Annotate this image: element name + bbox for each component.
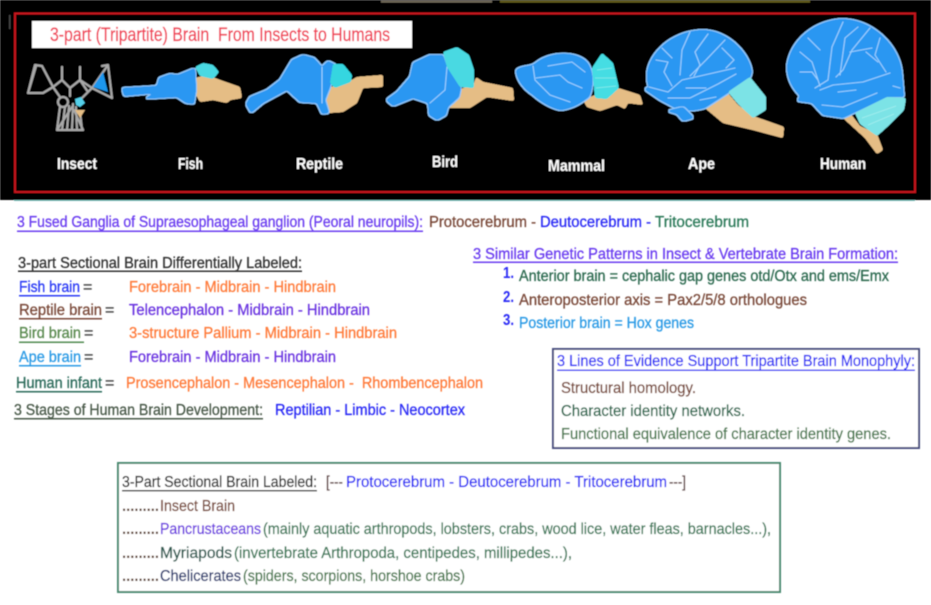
text block: genetic patterns: 3 Similar Genetic Patterns in Insect & Vertebrate Brain Formation: [473, 246, 898, 263]
panel: sectional brain labeled: Protocerebrum - Deutocerebrum - Tritocerebrum [346, 474, 667, 491]
panel: sectional brain labeled: [--- [326, 474, 343, 491]
icon: mammal brain [516, 53, 643, 111]
panel: lines of evidence: Character identity networks. [561, 403, 745, 420]
icon: reptile brain [246, 55, 383, 114]
text block: genetic patterns: 1. [503, 265, 514, 282]
panel: sectional brain labeled: ......... [122, 521, 159, 538]
text block: sectional brain list: Forebrain - Midbrain - Hindbrain [129, 279, 336, 296]
icon: insect brain [28, 65, 112, 130]
panel: sectional brain labeled: Chelicerates [160, 568, 241, 585]
text block: fused ganglia: 3 Fused Ganglia of Supraesophageal ganglion (Peoral neuropils): [17, 214, 423, 231]
species labels: Human [820, 156, 866, 173]
text block: sectional brain list: = [84, 325, 93, 342]
species labels: Ape [688, 156, 715, 173]
text block: sectional brain list: Fish brain [19, 279, 80, 296]
text block: stages of development: 3 Stages of Human Brain Development: [14, 402, 263, 419]
text block: sectional brain list: Ape brain [19, 349, 81, 366]
text block: sectional brain list: Bird brain [19, 325, 81, 342]
panel: lines of evidence: Structural homology. [561, 380, 696, 397]
icon: ape brain [644, 30, 784, 138]
text block: genetic patterns: Posterior brain = Hox genes [519, 315, 694, 332]
text block: fused ganglia [17, 214, 749, 232]
text block: sectional brain list: 3-part Sectional Brain Differentially Labeled: [18, 255, 302, 272]
text block: genetic patterns: 2. [503, 289, 514, 306]
icon: fish brain [122, 63, 242, 104]
text block: sectional brain list: Human infant [16, 375, 102, 392]
icon: human brain [787, 19, 906, 154]
text block: fused ganglia: Tritocerebrum [655, 214, 749, 231]
species labels: Bird [432, 154, 458, 171]
panel: sectional brain labeled [118, 463, 780, 592]
text block: sectional brain list: = [105, 375, 114, 392]
panel: sectional brain labeled: Insect Brain [160, 498, 235, 515]
text block: fused ganglia: Protocerebrum - [429, 214, 536, 231]
text block: sectional brain list [16, 255, 483, 392]
species labels: Mammal [548, 158, 605, 175]
text block: fused ganglia: Deutocerebrum - [540, 214, 651, 231]
text block: genetic patterns: Anterior brain = cephalic gap genes otd/Otx and ems/Emx [519, 268, 889, 285]
text block: sectional brain list: = [105, 302, 114, 319]
text block: sectional brain list: Forebrain - Midbrain - Hindbrain [129, 349, 336, 366]
panel: sectional brain labeled: (invertebrate Arthropoda, centipedes, millipedes...), [234, 545, 572, 562]
panel: lines of evidence [553, 349, 919, 448]
panel: sectional brain labeled: (mainly aquatic arthropods, lobsters, crabs, wood lice, water fleas, barnacles...), [263, 521, 771, 538]
title: 3-part (Tripartite) Brain From Insects to Humans [50, 25, 390, 46]
panel: sectional brain labeled: ---] [669, 474, 686, 491]
panel: sectional brain labeled: 3-Part Sectional Brain Labeled: [122, 474, 317, 491]
text block: sectional brain list: Prosencephalon - Mesencephalon - Rhombencephalon [126, 375, 483, 392]
icon: bird brain [386, 47, 514, 120]
text block: sectional brain list: Telencephalon - Midbrain - Hindbrain [129, 302, 370, 319]
text block: sectional brain list: Reptile brain [19, 302, 102, 319]
text block: stages of development [14, 402, 465, 420]
panel: sectional brain labeled: (spiders, scorpions, horshoe crabs) [243, 568, 465, 585]
panel: sectional brain labeled: Pancrustaceans [160, 521, 261, 538]
text block: genetic patterns [473, 246, 898, 332]
title [32, 21, 412, 48]
species labels: Insect [57, 156, 98, 173]
species labels [57, 154, 866, 175]
panel: sectional brain labeled: Myriapods [160, 545, 232, 562]
panel: sectional brain labeled: ......... [122, 545, 159, 562]
text block: stages of development: Reptilian - Limbic - Neocortex [275, 402, 465, 419]
panel: lines of evidence: Functional equivalence of character identity genes. [561, 426, 891, 443]
text block: sectional brain list: 3-structure Pallium - Midbrain - Hindbrain [129, 325, 397, 342]
text block: genetic patterns: Anteroposterior axis = Pax2/5/8 orthologues [519, 292, 807, 309]
text block: sectional brain list: = [83, 279, 92, 296]
species labels: Reptile [296, 156, 343, 173]
text block: genetic patterns: 3. [503, 312, 514, 329]
panel: black brain banner [0, 0, 931, 201]
panel: sectional brain labeled: ......... [122, 498, 159, 515]
text block: sectional brain list: = [84, 349, 93, 366]
panel: sectional brain labeled: ......... [122, 568, 159, 585]
species labels: Fish [178, 156, 203, 173]
